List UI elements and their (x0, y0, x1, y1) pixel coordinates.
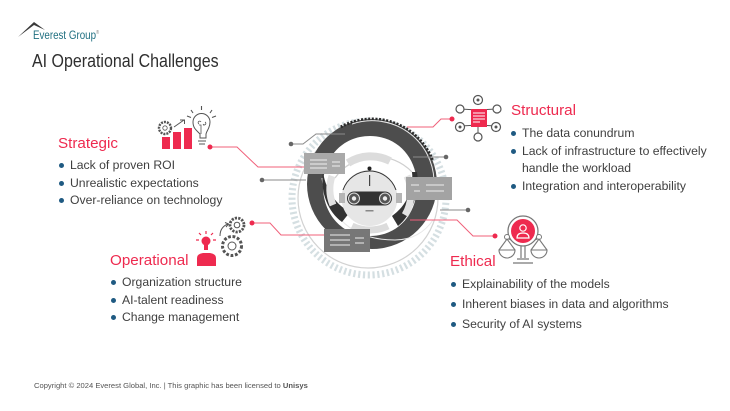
list: Ethical: Security of AI systems (462, 317, 582, 331)
heading: Ethical: Ethical (450, 253, 496, 270)
dark tire (307, 119, 437, 249)
list: Structural: handle the workload (522, 161, 631, 175)
inner circle and segments (335, 157, 412, 178)
list: Ethical (451, 277, 669, 331)
list: Strategic: Over-reliance on technology (70, 193, 222, 207)
heading: Strategic: Strategic (58, 135, 118, 152)
inner swirls (322, 172, 350, 222)
list: Strategic: Unrealistic expectations (70, 176, 199, 190)
bubble: right (406, 177, 452, 200)
footer copyright: Copyright © 2024 Everest Global, Inc. | This graphic has been licensed to Unisys (34, 381, 308, 390)
logo: Everest Group (18, 22, 100, 42)
list: Ethical: Inherent biases in data and algorithms (462, 297, 669, 311)
list: Strategic (59, 158, 222, 207)
bubble: top-left (304, 153, 345, 174)
robot head (342, 170, 398, 226)
list: Operational: Change management (122, 310, 239, 324)
list: Operational (111, 275, 242, 324)
tick ring (292, 121, 446, 275)
heading: Operational: Operational (110, 252, 189, 269)
logo: Everest Group: Everest Group® (33, 30, 99, 42)
list: Structural: The data conundrum (522, 126, 634, 140)
list: Structural: Lack of infrastructure to effectively (522, 144, 707, 158)
list: Operational: Organization structure (122, 275, 242, 289)
central robot illustration (288, 118, 452, 278)
list: Operational: AI-talent readiness (122, 293, 224, 307)
list: Strategic: Lack of proven ROI (70, 158, 175, 172)
bubble: bottom (324, 229, 370, 252)
list: Ethical: Explainability of the models (462, 277, 610, 291)
list: Structural: Integration and interoperability (522, 179, 686, 193)
title: AI Operational Challenges (32, 51, 219, 71)
list: Structural (511, 126, 707, 193)
heading: Structural: Structural (511, 102, 576, 119)
thin outer circle (298, 128, 438, 268)
